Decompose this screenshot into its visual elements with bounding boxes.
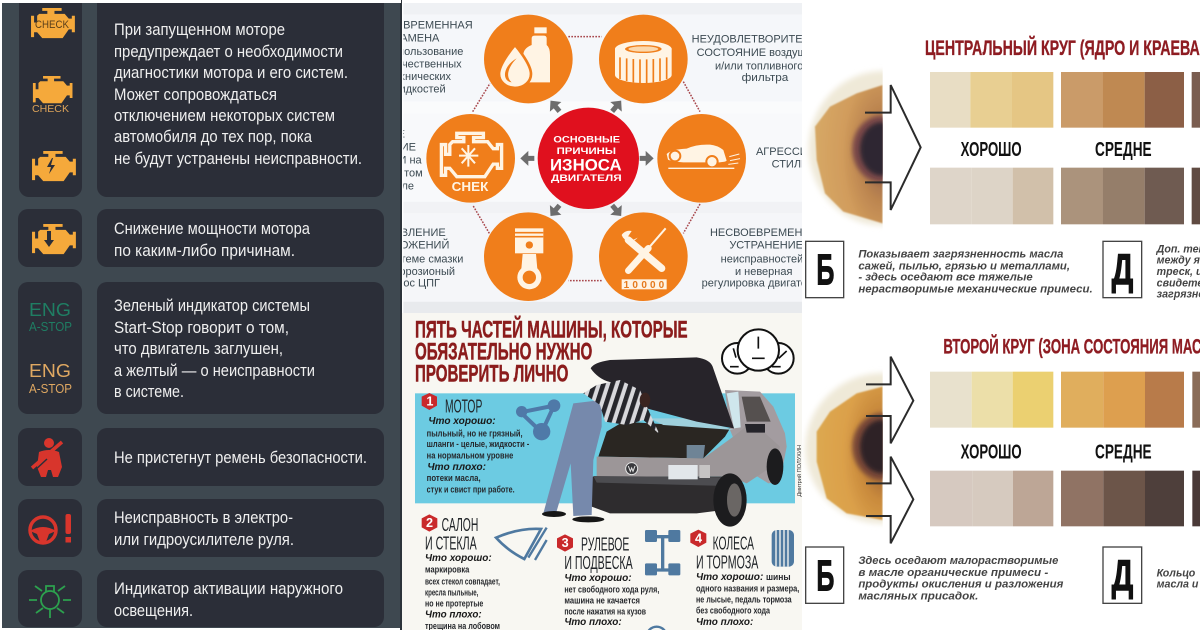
- section 3: steering and suspension: [557, 530, 680, 630]
- text: steering good and bad: нет свободного хода руля,: [564, 584, 659, 594]
- text: check engine description: диагностики мотора и его систем.: [114, 63, 348, 82]
- centre circle: main causes of engine wear: [538, 108, 639, 209]
- text: seat belt description: Не пристегнут ремень безопасности.: [114, 448, 367, 467]
- text: steering good and bad: после нажатия на кузов: [564, 606, 646, 616]
- text: lighting description: [114, 579, 343, 620]
- icon circle: wrench, screwdriver, odometer: 1: [624, 280, 630, 291]
- panel: dashboard warning lights: [0, 0, 402, 630]
- text: deposits cause: в системе смазки: [375, 254, 463, 266]
- icon circle: oil and fluids: [484, 15, 573, 103]
- heading: interior and glass: [426, 518, 478, 550]
- section 2: interior and glass: [422, 514, 547, 630]
- text: motor good and bad: Что хорошо:: [428, 416, 496, 427]
- heading: wheels and brakes: И ТОРМОЗА: [696, 551, 759, 572]
- icon circle: sport car: [657, 114, 746, 203]
- swatches: top row: [930, 372, 1200, 428]
- badge 4: 4: [695, 531, 702, 545]
- text: reduced power description: [114, 219, 310, 260]
- letter box: Д: [1103, 241, 1142, 298]
- text: interior good and bad: кресла пыльные,: [425, 588, 478, 598]
- text: check engine description: [114, 20, 362, 168]
- arrow outline: [865, 85, 921, 210]
- text: additives description: [1156, 243, 1200, 301]
- text: lighting description: Индикатор активации наружного: [114, 579, 343, 598]
- text: steering good and bad: машина не качается: [564, 595, 640, 605]
- icon: green ENG A-STOP: ENG: [29, 300, 71, 320]
- letter box: Д: [1103, 547, 1142, 603]
- letter box: Б: [806, 547, 844, 603]
- icon: engine with CHECK inside: [31, 8, 75, 38]
- text: core description: - здесь оседают все тяжелые: [858, 272, 1033, 284]
- text: ring description: Кольцо: [1157, 568, 1196, 580]
- centre circle: main causes of engine wear: ОСНОВНЫЕ: [553, 135, 620, 145]
- text: filters cause: [692, 35, 802, 84]
- text: motor good and bad: потеки масла,: [427, 473, 481, 483]
- icon: windshield wiper: [496, 528, 547, 560]
- text: reduced power description: по каким-либо причинам.: [114, 241, 295, 260]
- section 1: motor on blue background: [415, 393, 795, 503]
- icon circle: wrench, screwdriver, odometer: 0: [632, 280, 638, 291]
- title: ПЯТЬ ЧАСТЕЙ МАШИНЫ, КОТОРЫЕ: [415, 316, 688, 344]
- text: steering good and bad: [564, 573, 659, 628]
- title: [415, 316, 688, 388]
- heading: motor: МОТОР: [445, 395, 482, 416]
- text: core description: [858, 248, 1093, 295]
- photo: car with open hood and mechanic: [542, 357, 787, 527]
- photo: oil stain second zone: [805, 373, 960, 524]
- heading: interior and glass: И СТЕКЛА: [425, 532, 477, 553]
- text: deposits cause: ПОЯВЛЕНИЕ: [377, 227, 446, 239]
- row: power steering: [18, 499, 384, 557]
- heading: wheels and brakes: [696, 536, 758, 568]
- text: wheels good and bad: Что хорошо:: [696, 572, 763, 583]
- icon circle: engine CHEK: [426, 114, 515, 203]
- text: filters cause: и/или топливного: [715, 60, 803, 72]
- text: deposits cause: [403, 228, 463, 289]
- text: start-stop description: а желтый — о неисправности: [114, 361, 315, 380]
- icon: light bulb: [29, 586, 71, 618]
- text: core description: нерастворимые механические примеси.: [858, 283, 1093, 295]
- text: motor good and bad: Что плохо:: [427, 462, 486, 473]
- arrows: from centre to each cause: [520, 96, 654, 221]
- text: check engine description: не будут устранены неисправности.: [114, 149, 362, 168]
- icon: engine with lightning bolt: [32, 151, 76, 181]
- text: wheels good and bad: не лысые, педаль тормоза: [696, 594, 792, 604]
- text: interior good and bad: [425, 553, 500, 630]
- text: second zone description: [858, 555, 1064, 602]
- heading: steering and suspension: РУЛЕВОЕ: [581, 534, 629, 555]
- text: late repair cause: [702, 228, 802, 289]
- text: late repair cause: НЕСВОЕВРЕМЕННОЕ: [710, 227, 826, 239]
- badge 2: 2: [426, 516, 433, 530]
- text: reduced power description: Снижение мощности мотора: [114, 219, 310, 238]
- text: lighting description: освещения.: [114, 601, 193, 620]
- text: motor good and bad: шланги - целые, жидкости -: [427, 439, 529, 449]
- title: ПРОВЕРИТЬ ЛИЧНО: [415, 361, 568, 388]
- text: late repair cause: неисправностей: [721, 254, 803, 266]
- text: interior good and bad: Что плохо:: [425, 610, 482, 621]
- icon: steering wheel with exclamation: [30, 514, 71, 543]
- text: steering good and bad: Что плохо:: [564, 617, 622, 628]
- credit: photographer: Дмитрий ПОЛУХИН: [796, 445, 803, 497]
- text: untimely fluid replacement: [403, 21, 472, 95]
- letter box: Д: Д: [1112, 246, 1133, 295]
- icon: green ENG A-STOP: [29, 300, 72, 334]
- icon circle: wrench, screwdriver, odometer: 0: [641, 280, 647, 291]
- text: overheating cause: ле: [401, 180, 414, 192]
- text: untimely fluid replacement: использование: [387, 46, 463, 58]
- badge 1: 1: [426, 395, 433, 409]
- arrow outline: upper: [866, 357, 913, 443]
- icon: green ENG A-STOP: A-STOP: [29, 319, 72, 334]
- text: steering good and bad: Что хорошо:: [564, 573, 632, 584]
- text: filters cause: СОСТОЯНИЕ воздушного: [697, 47, 828, 59]
- text: overheating cause: И на: [399, 155, 423, 167]
- label: good: ХОРОШО: [961, 138, 1022, 161]
- letter box: Б: Б: [816, 551, 834, 600]
- text: interior good and bad: всех стекол совпадает,: [425, 576, 500, 586]
- connectors: dotted ring between circles: [473, 37, 700, 281]
- panel: main causes of engine wear: [403, 3, 802, 313]
- text: untimely fluid replacement: ЗАМЕНА: [394, 33, 440, 45]
- text: untimely fluid replacement: СВОЕВРЕМЕННАЯ: [372, 19, 473, 31]
- text: late repair cause: регулировка двигателя: [702, 278, 819, 290]
- text: untimely fluid replacement: жидкостей: [392, 83, 446, 95]
- text: second zone description: в масле органические примеси -: [858, 567, 1049, 579]
- swatches: bottom row: [930, 471, 1200, 526]
- text: untimely fluid replacement: качественных: [391, 58, 462, 70]
- text: wheels good and bad: шины: [766, 572, 791, 582]
- label: good: ХОРОШО: [961, 440, 1022, 463]
- centre circle: main causes of engine wear: ПРИЧИНЫ: [557, 146, 616, 156]
- arrow outline: lower: [866, 457, 913, 543]
- heading: interior and glass: САЛОН: [442, 514, 478, 535]
- row: start-stop system: [18, 282, 384, 414]
- row: seat belt: [18, 428, 384, 486]
- icon circle: air filter: [599, 15, 688, 103]
- icon: gauges: [722, 329, 794, 374]
- icon: engine with down arrow: [32, 224, 76, 254]
- text: power steering description: [114, 508, 294, 549]
- icon: engine above CHECK label: [32, 76, 72, 115]
- text: ring description: [1157, 568, 1199, 591]
- panel: five car parts to check: [402, 313, 803, 630]
- text: overheating cause: НИЕ: [393, 142, 416, 154]
- text: motor good and bad: стук и свист при работе.: [427, 485, 515, 495]
- text: core description: Показывает загрязненность масла: [858, 248, 1063, 260]
- text: filters cause: НЕУДОВЛЕТВОРИТЕЛЬНОЕ: [692, 33, 841, 45]
- badge 1: [422, 393, 437, 410]
- icon: yellow ENG A-STOP: [29, 361, 72, 396]
- panel: oil spot second circle: [802, 315, 1200, 630]
- icon: engine with CHECK inside: CHECK: [35, 19, 70, 31]
- text: motor good and bad: пыльный, но не грязный,: [427, 428, 523, 438]
- icon: steering wheel partly visible: [647, 627, 667, 630]
- centre circle: main causes of engine wear: ИЗНОСА: [550, 155, 622, 174]
- icon circle: wrench, screwdriver, odometer: 0: [650, 280, 656, 291]
- text: second zone description: Здесь оседают малорастворимые: [858, 555, 1058, 567]
- badge 3: 3: [562, 536, 569, 550]
- text: second zone description: продукты окисления и разложения: [858, 579, 1064, 591]
- text: deposits cause: ОТЛОЖЕНИЙ: [378, 239, 449, 252]
- text: power steering description: или гидроусилителе руля.: [114, 530, 294, 549]
- text: second zone description: масляных присадок.: [858, 590, 978, 602]
- text: core description: сажей, пылью, грязью и металлами,: [858, 260, 1070, 272]
- text: untimely fluid replacement: технических: [389, 71, 451, 83]
- text: aggressive driving cause: СТИЛЬ: [772, 159, 808, 171]
- text: motor good and bad: на нормальном уровне: [427, 450, 513, 460]
- text: start-stop description: [114, 296, 315, 401]
- text: late repair cause: и неверная: [735, 266, 792, 278]
- text: overheating cause: Е: [398, 128, 405, 140]
- heading: wheels and brakes: КОЛЕСА: [713, 532, 754, 553]
- icon: yellow ENG A-STOP: ENG: [29, 361, 71, 381]
- text: start-stop description: что двигатель заглушен,: [114, 339, 283, 358]
- text: deposits cause: коррозионый: [388, 266, 455, 278]
- text: overheating cause: [403, 130, 422, 190]
- icon circle: wrench, screwdriver, odometer: [599, 212, 688, 301]
- row: exterior lighting: [18, 570, 384, 627]
- icon: belt drive: [516, 399, 560, 440]
- letter box: Б: [806, 241, 844, 298]
- icon: engine above CHECK label: CHECK: [32, 104, 69, 115]
- text: filters cause: фильтра: [742, 72, 789, 84]
- text: wheels good and bad: [696, 572, 799, 628]
- text: check engine description: предупреждает о необходимости: [114, 42, 343, 61]
- text: wheels good and bad: одного названия и размера,: [696, 584, 799, 594]
- icon circle: piston: [484, 212, 573, 301]
- text: overheating cause: том: [404, 168, 423, 180]
- text: check engine description: При запущенном моторе: [114, 20, 285, 39]
- icon circle: wrench, screwdriver, odometer: 0: [659, 280, 665, 291]
- heading: steering and suspension: И ПОДВЕСКА: [564, 552, 633, 573]
- text: aggressive driving cause: [756, 148, 802, 168]
- row: check engine indicators: [0, 0, 401, 197]
- icon: tire tread: [772, 530, 794, 567]
- text: interior good and bad: маркировка: [425, 564, 470, 574]
- text: late repair cause: УСТРАНЕНИЕ: [729, 240, 803, 252]
- text: check engine description: Может сопровождаться: [114, 85, 277, 104]
- photo: oil stain central core: [809, 71, 957, 226]
- letter box: Б: Б: [816, 246, 834, 295]
- text: start-stop description: в системе.: [114, 382, 184, 401]
- label: medium: СРЕДНЕ: [1095, 440, 1152, 463]
- letter box: Д: Д: [1112, 551, 1133, 600]
- heading: steering and suspension: [565, 538, 633, 573]
- text: power steering description: Неисправность в электро-: [114, 508, 293, 527]
- title: ОБЯЗАТЕЛЬНО НУЖНО: [415, 339, 592, 366]
- swatches: top row: [930, 72, 1200, 128]
- text: interior good and bad: Что хорошо:: [425, 553, 492, 564]
- text: check engine description: автомобиля до тех пор, пока: [114, 127, 312, 146]
- text: wheels good and bad: без свободного хода: [696, 605, 771, 615]
- icon: yellow ENG A-STOP: A-STOP: [29, 381, 72, 396]
- section 4: wheels and brakes: [690, 530, 799, 628]
- text: start-stop description: Start-Stop говорит о том,: [114, 318, 289, 337]
- panel: oil spot central circle: [802, 0, 1200, 315]
- text: ring description: масла и: [1157, 579, 1199, 591]
- swatches: bottom row: [930, 168, 1200, 224]
- text: wheels good and bad: Что плохо:: [696, 617, 753, 628]
- text: check engine description: отключением некоторых систем: [114, 106, 335, 125]
- row: reduced engine power: [18, 209, 384, 267]
- text: interior good and bad: но не протертые: [425, 599, 483, 609]
- text: deposits cause: износ ЦПГ: [386, 278, 440, 290]
- icon: chassis: [645, 530, 680, 575]
- label: medium: СРЕДНЕ: [1095, 138, 1152, 161]
- centre circle: main causes of engine wear: ДВИГАТЕЛЯ: [551, 173, 622, 183]
- icon: seat belt: [32, 438, 62, 477]
- text: motor good and bad: [427, 416, 529, 495]
- text: aggressive driving cause: АГРЕССИВНЫЙ: [756, 145, 841, 158]
- icon circle: engine CHEK: СНЕК: [452, 179, 488, 194]
- text: start-stop description: Зеленый индикатор системы: [114, 296, 310, 315]
